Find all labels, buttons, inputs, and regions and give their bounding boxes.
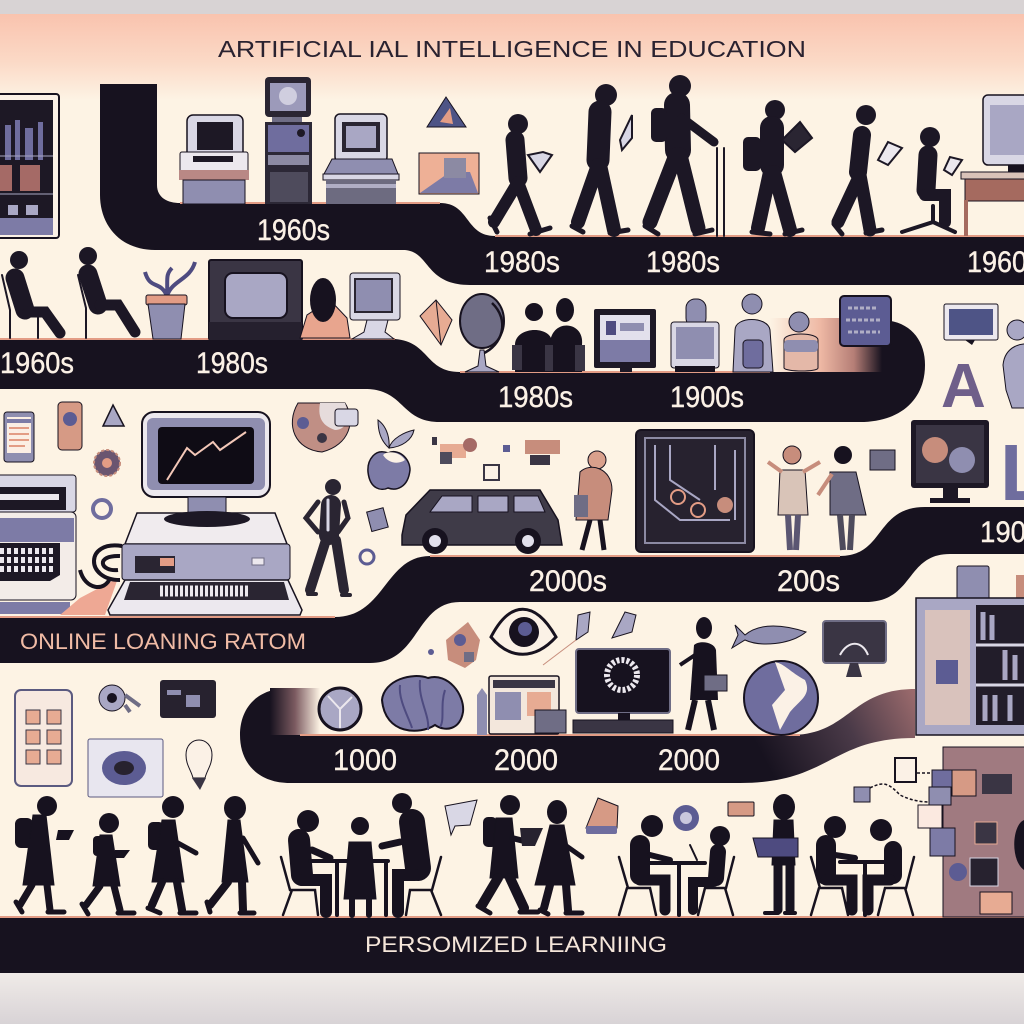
icon: light bulb (186, 740, 212, 790)
timeline band 4 (240, 688, 915, 783)
2000: 2000 (658, 744, 720, 777)
timeline band 3 (0, 507, 1024, 663)
bottom band (0, 918, 1024, 973)
woman 2 (818, 446, 866, 550)
icon: pixel cluster (428, 622, 480, 668)
elderly woman (574, 451, 612, 550)
computer with chart (108, 412, 302, 615)
bottom grey strip (0, 973, 1024, 1024)
icon: envelope card (419, 153, 479, 194)
icon: speech tablet (944, 304, 998, 345)
icon: computer terminal 2 (323, 114, 399, 204)
icon: bookshelf screen top left (0, 94, 59, 238)
silhouettes walking row 1 (490, 75, 962, 236)
icon: robot figure (733, 294, 773, 372)
icon: mottled globe (292, 403, 358, 452)
table group (281, 793, 441, 915)
icon: flat monitor (594, 309, 656, 372)
icon: gauge monitor (823, 621, 886, 677)
label: online learning: ONLINE LOANING RATOM (20, 629, 306, 654)
base unit (122, 513, 290, 580)
icon: globe earth (744, 661, 818, 735)
monitor (142, 412, 270, 497)
letter A: A (941, 352, 986, 421)
person 5 (834, 105, 902, 234)
woman with bag silhouette (680, 617, 727, 730)
silhouette people row 5 (15, 793, 914, 915)
icon: tablet (4, 412, 34, 462)
icon: probe (543, 612, 590, 665)
icon: circuit board (636, 430, 754, 552)
monitor stand (164, 511, 250, 527)
200s: 200s (777, 565, 840, 598)
icon: gear dot (94, 450, 120, 476)
icon: brain (382, 676, 463, 731)
person 1 (490, 114, 552, 234)
person 4 with backpack (743, 100, 812, 234)
1980s: 1980s (646, 246, 720, 279)
person 2 (572, 84, 632, 233)
1960s: 1960s (257, 214, 330, 247)
icon: bookshelf (916, 566, 1024, 735)
icon: small card top right (870, 450, 895, 470)
girl at computer (300, 278, 350, 338)
student 1 (15, 796, 74, 912)
icon: computer terminal 1 (179, 115, 249, 204)
icon: desktop monitor with burst (573, 649, 673, 733)
timeline band 1 (100, 84, 1024, 285)
icon: eye (491, 609, 556, 654)
icon: monitor with gears (911, 420, 989, 503)
icon: capsule robot (784, 312, 818, 371)
top grey strip (0, 0, 1024, 14)
title: ARTIFICIAL IAL INTELLIGENCE IN EDUCATION (218, 36, 806, 62)
1980s: 1980s (196, 347, 268, 380)
icon: computer tower (265, 77, 312, 204)
icon: chalkboard (840, 296, 891, 346)
1960s: 1960s (0, 347, 74, 380)
floating chat icons (445, 798, 754, 835)
walker 1 (478, 795, 543, 913)
icon: pen nib (612, 612, 636, 638)
van (402, 490, 562, 554)
keyboard (108, 580, 302, 615)
1900s: 1900s (670, 381, 744, 414)
icon: badge card (88, 739, 163, 797)
icon: phone (58, 402, 82, 450)
figure at right edge (1003, 320, 1024, 408)
icon: ring small (360, 550, 374, 564)
student 4 (207, 796, 258, 913)
icon: web page screen (477, 676, 566, 735)
collage wall of screens (854, 747, 1024, 917)
icon: old television (209, 260, 302, 340)
icon: small card (367, 508, 388, 531)
salmon floor patches (60, 578, 118, 615)
icon: small monitor (350, 273, 400, 339)
seated pair (619, 815, 734, 915)
walker 2 (535, 800, 582, 914)
icon: globe (460, 294, 504, 372)
icon: gem (420, 300, 452, 345)
top pink header band (0, 14, 1024, 100)
timeline band 2 (0, 318, 925, 422)
2000s: 2000s (529, 565, 607, 598)
1980s: 1980s (498, 381, 573, 414)
icon: triangle badge (427, 97, 466, 127)
seated pair right (811, 816, 914, 915)
icon: potted plant (145, 262, 195, 339)
two women talking (768, 446, 866, 550)
standing woman (753, 794, 798, 913)
icon: mechanical eye (99, 685, 140, 712)
icon: small triangle (103, 405, 124, 426)
student 3 (148, 796, 196, 913)
seated person 1 (2, 251, 60, 338)
person 3 with cane (645, 75, 724, 236)
1000: 1000 (333, 744, 397, 777)
child 2 (82, 813, 134, 914)
small floating icons (432, 437, 560, 480)
seated people row 2 (2, 247, 135, 338)
icon: fish shape (732, 625, 806, 648)
monitor neck (188, 497, 226, 515)
1980s: 1980s (484, 246, 560, 279)
2000: 2000 (494, 744, 558, 777)
year labels (0, 214, 1024, 777)
businessman (306, 479, 350, 595)
seated person 2 (78, 247, 135, 338)
two seated figures (512, 298, 585, 372)
person 6 seated on stool (902, 127, 962, 232)
ground lines (0, 203, 1024, 917)
icon: smartphone with app grid (15, 690, 72, 786)
icon: dark device (160, 680, 216, 718)
icon: typewriter (0, 475, 76, 614)
icon: apple (368, 420, 414, 489)
icon: robot machine (671, 299, 719, 372)
woman 1 (768, 446, 820, 550)
icon: cable coil (80, 545, 122, 587)
icon: desk with computer (961, 95, 1024, 236)
icon: ring (93, 500, 111, 518)
label: personalized learning: PERSOMIZED LEARNIING (365, 932, 667, 957)
icon: round clock (319, 688, 361, 730)
